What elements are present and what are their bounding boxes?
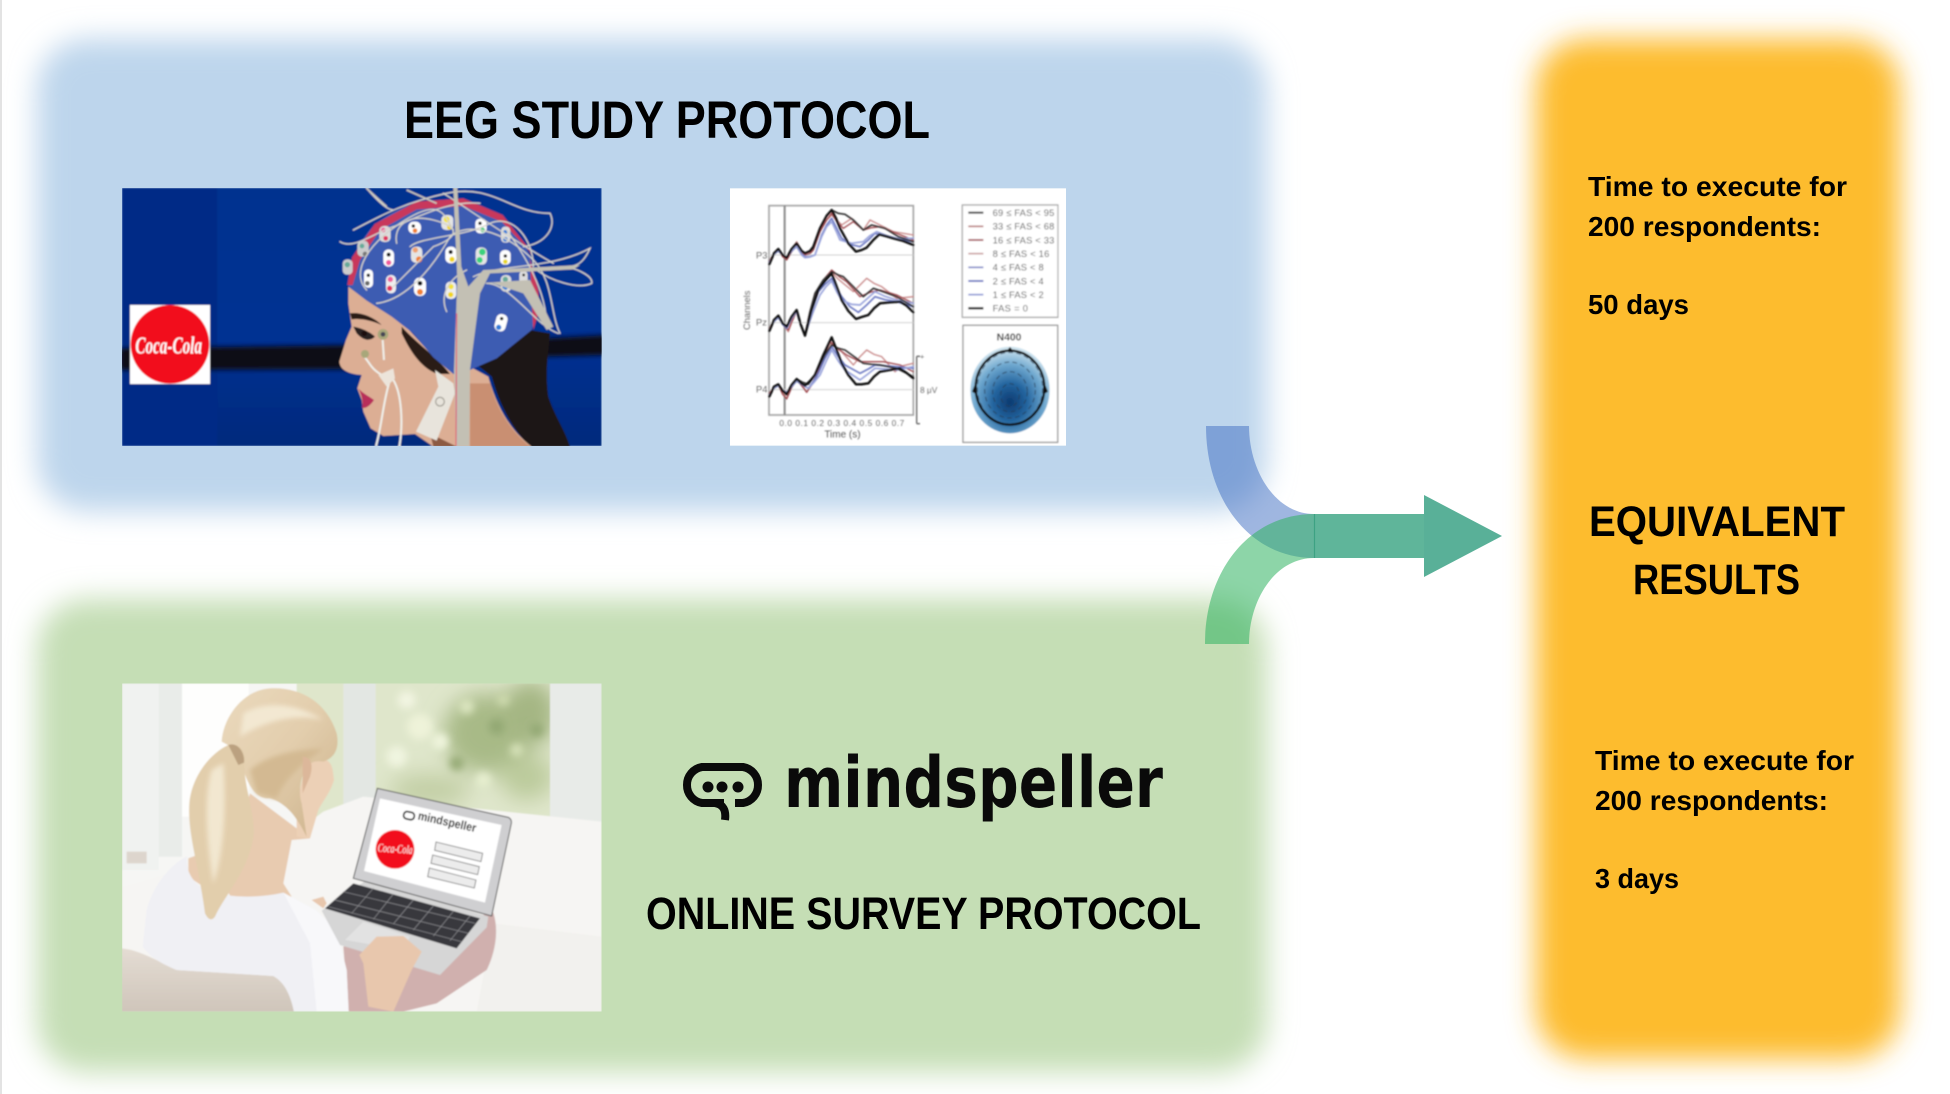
chart: ERP waveforms and N400 scalp map: Time (s) [824, 430, 861, 441]
cap [348, 200, 538, 374]
text: EEG time to execute [1588, 171, 1847, 320]
heading: online survey protocol: ONLINE SURVEY PROTOCOL [646, 888, 1201, 939]
Pz traces [769, 272, 913, 335]
cushion [122, 948, 294, 1012]
text: EEG time to execute: Time to execute for [1588, 171, 1847, 202]
chart: ERP waveforms and N400 scalp map: 1 ≤ FAS < 2 [993, 290, 1044, 300]
neck and face [339, 287, 532, 447]
logo: Mindspeller [687, 742, 1163, 824]
chart: ERP waveforms and N400 scalp map: 16 ≤ FAS < 33 [993, 235, 1054, 245]
chart: ERP waveforms and N400 scalp map: 33 ≤ FAS < 68 [993, 222, 1054, 232]
panel: EEG study protocol background [37, 39, 1267, 511]
chart: ERP waveforms and N400 scalp map: 4 ≤ FAS < 8 [993, 263, 1044, 273]
hair [222, 688, 338, 837]
chart: ERP waveforms and N400 scalp map: 0.0 0.1 0.2 0.3 0.4 0.5 0.6 0.7 [779, 418, 905, 428]
chart: ERP waveforms and N400 scalp map [730, 188, 1066, 446]
photo: woman using the Mindspeller survey on a laptop: Coca-Cola [377, 840, 413, 857]
face electrodes [378, 329, 388, 340]
blue curve [1206, 426, 1314, 558]
arrow head [1424, 495, 1502, 577]
keyboard [325, 883, 480, 948]
sofa [317, 796, 601, 823]
laptop base [322, 880, 488, 975]
wordmark: mindspeller [784, 742, 1163, 824]
scale bar [917, 356, 920, 424]
text: online survey time to execute: 200 respondents: [1595, 785, 1828, 816]
trackpad and hand [346, 922, 409, 944]
heading: equivalent results: EQUIVALENT [1589, 498, 1845, 546]
photo: woman wearing EEG cap with Coca-Cola logo: Coca-Cola [135, 333, 202, 359]
legend [962, 205, 1058, 317]
text: online survey time to execute: Time to execute for [1595, 745, 1854, 776]
photo: woman using the Mindspeller survey on a laptop: mindspeller [417, 809, 478, 835]
axis labels: P3 [756, 250, 767, 260]
hair [478, 330, 570, 446]
P4 traces [769, 343, 913, 398]
chart: ERP waveforms and N400 scalp map: 8 ≤ FAS < 16 [993, 249, 1049, 259]
chart: ERP waveforms and N400 scalp map: FAS = 0 [993, 304, 1028, 314]
photo: woman wearing EEG cap with Coca-Cola logo [120, 188, 607, 447]
text: online survey time to execute: 3 days [1595, 863, 1679, 894]
heading: EEG study protocol: EEG STUDY PROTOCOL [404, 91, 930, 150]
strap [416, 370, 455, 441]
wires [340, 188, 592, 333]
chart: ERP waveforms and N400 scalp map: Channels [742, 290, 752, 330]
trousers [343, 913, 496, 1012]
text: EEG time to execute: 200 respondents: [1588, 211, 1821, 242]
chart: ERP waveforms and N400 scalp map: 69 ≤ FAS < 95 [993, 208, 1054, 218]
face details [350, 313, 382, 325]
ponytail [189, 745, 254, 919]
neck [223, 793, 310, 902]
chart: ERP waveforms and N400 scalp map: P4 [756, 384, 767, 394]
panel: results background [1536, 39, 1900, 1059]
chart: ERP waveforms and N400 scalp map: N400 [997, 333, 1022, 344]
text: online survey time to execute [1595, 745, 1854, 894]
icon: speech bubble [687, 767, 758, 820]
panel: online survey protocol background [37, 599, 1267, 1072]
heading: equivalent results: RESULTS [1633, 556, 1800, 604]
window and greenery [297, 683, 550, 817]
electrodes [343, 215, 528, 333]
text: EEG time to execute: 50 days [1588, 289, 1689, 320]
green curve [1205, 514, 1314, 644]
chart: ERP waveforms and N400 scalp map: Pz [756, 318, 767, 328]
waveform plot frame [769, 206, 913, 415]
P3 traces [769, 210, 913, 399]
shaft [1314, 514, 1425, 558]
heading: equivalent results [1589, 498, 1845, 604]
scalp map [963, 325, 1058, 442]
chart: ERP waveforms and N400 scalp map: 2 ≤ FAS < 4 [993, 276, 1044, 286]
arrow: merging arrow from both protocols to results [1205, 426, 1502, 644]
form fields [428, 842, 483, 888]
Coca-Cola logo [130, 305, 210, 384]
chart: ERP waveforms and N400 scalp map: 8 μV [920, 385, 938, 395]
shirt [162, 871, 286, 968]
chart: ERP waveforms and N400 scalp map: + [920, 352, 924, 361]
photo: woman using the Mindspeller survey on a laptop [122, 680, 602, 1012]
laptop screen [353, 788, 511, 916]
